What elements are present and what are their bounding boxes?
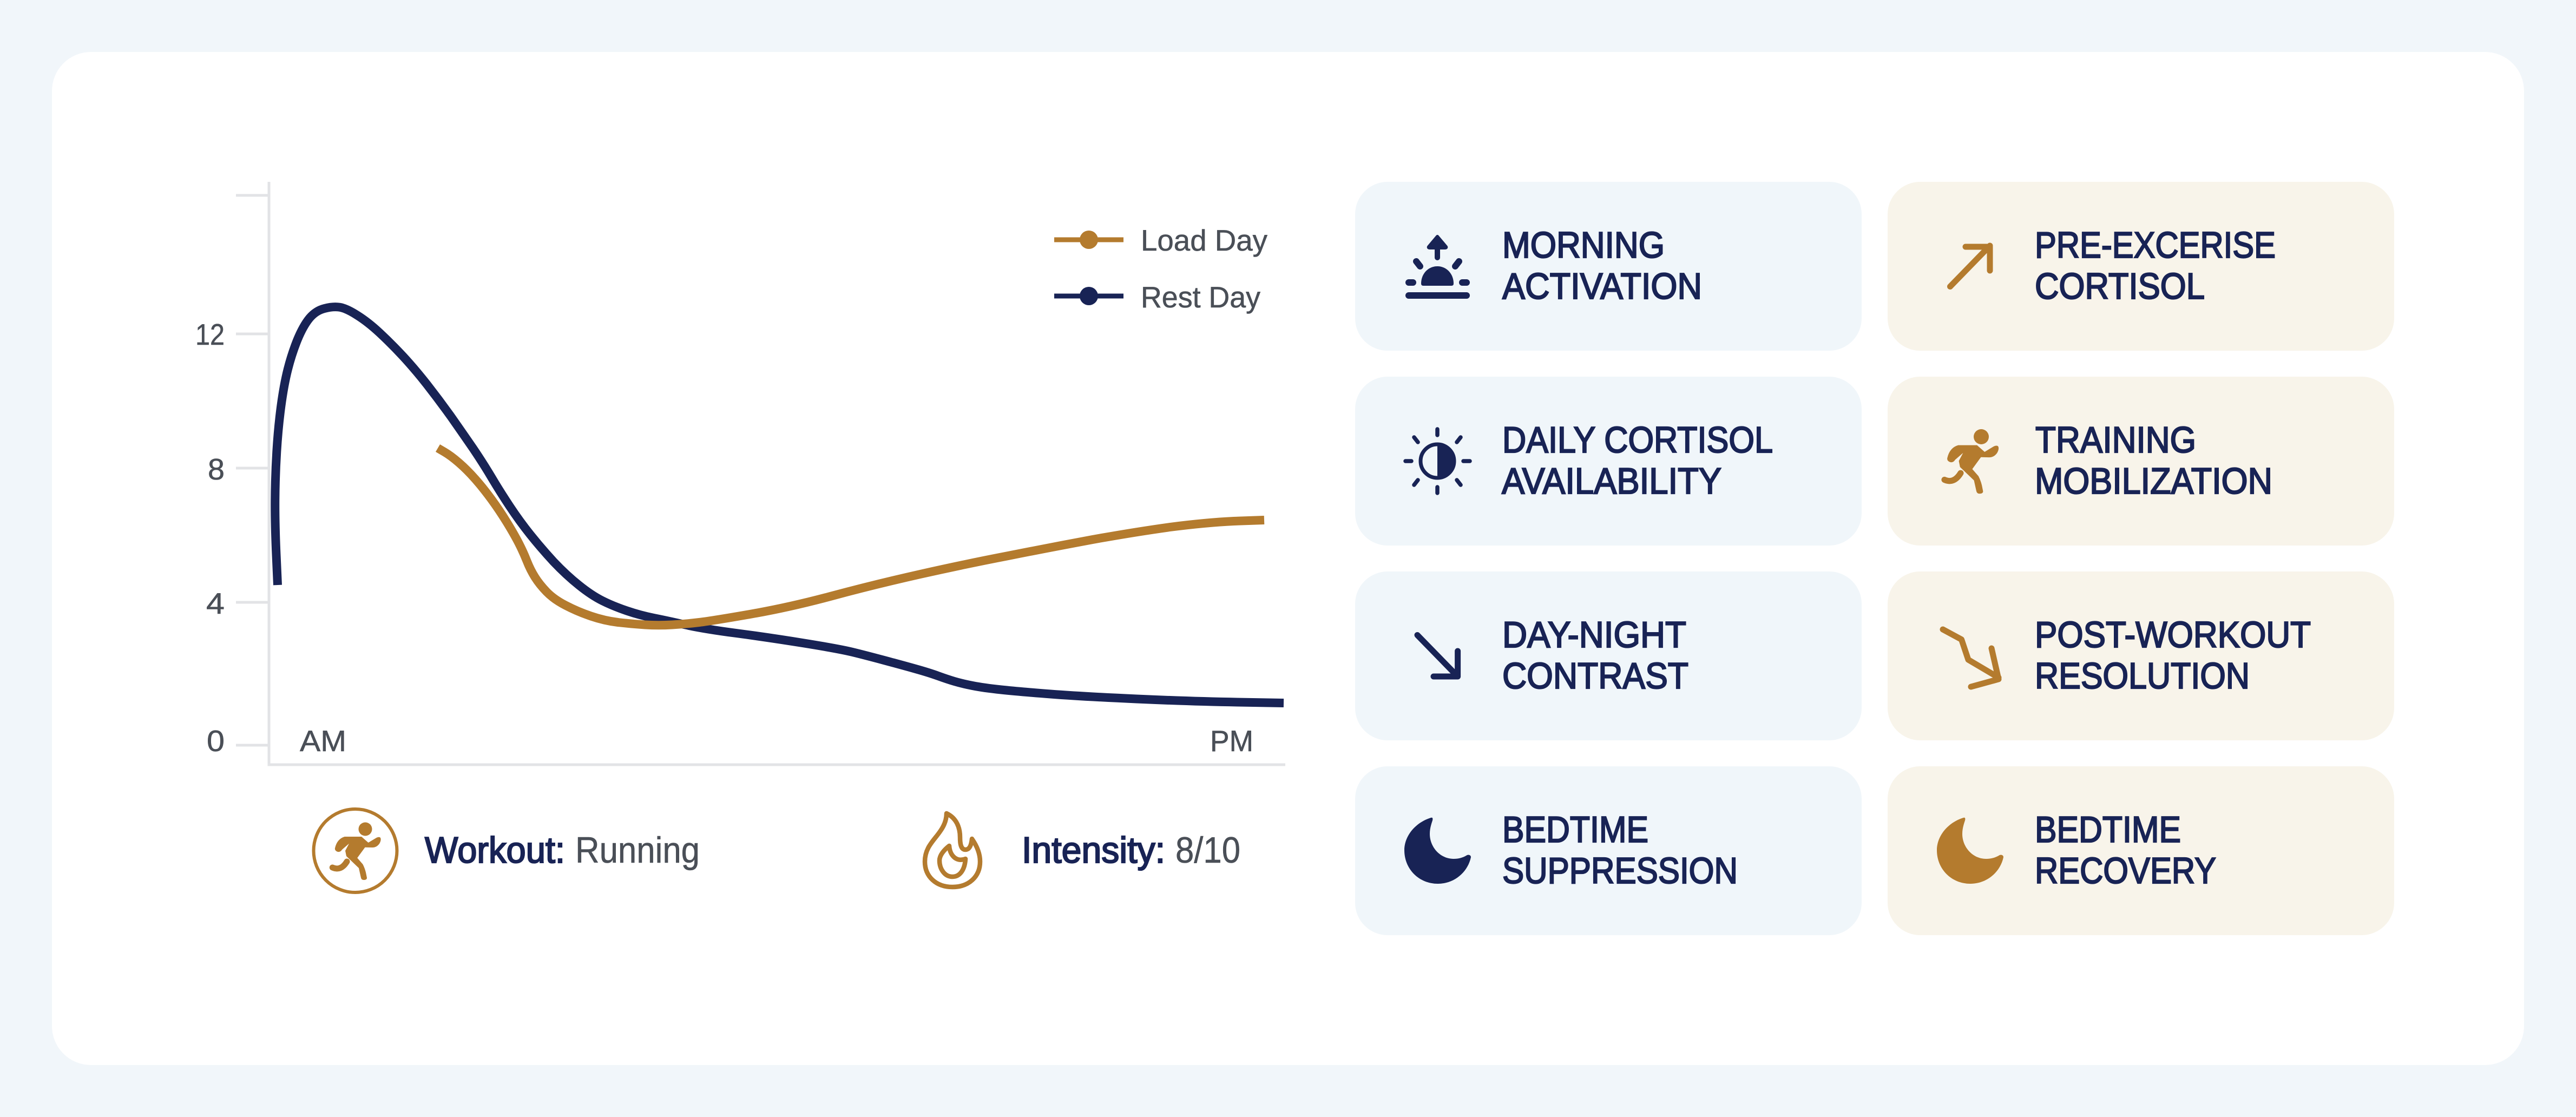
card title: RECOVERY: [2035, 850, 2216, 891]
y-axis labels: 8: [208, 452, 225, 486]
workout label: Workout:: [425, 830, 565, 871]
panel: post-workout resolution: [1888, 571, 2394, 740]
card title: BEDTIME: [1502, 809, 1648, 850]
panel: pre-exercise cortisol: [1888, 182, 2394, 351]
panel: day-night contrast: [1355, 571, 1862, 740]
card title: CORTISOL: [2035, 266, 2205, 307]
line chart: [195, 182, 1285, 765]
card title: SUPPRESSION: [1502, 850, 1738, 891]
card title: [1502, 419, 1773, 502]
card title: MORNING: [1502, 225, 1665, 266]
workout value: Running: [575, 830, 700, 871]
icon: moon: [1937, 818, 2003, 884]
legend item: rest day: Rest Day: [1141, 280, 1260, 314]
icon: running person: [1944, 429, 1999, 494]
panel: morning activation: [1355, 182, 1862, 351]
line: rest day: [275, 307, 1284, 703]
card title: [1502, 809, 1738, 891]
card title: [2035, 614, 2311, 697]
y-axis labels: [195, 318, 225, 758]
icon: sunrise: [1409, 236, 1467, 295]
card title: PRE-EXCERISE: [2035, 225, 2276, 266]
x-axis label: PM: PM: [1210, 724, 1253, 758]
panel: training mobilization: [1888, 377, 2394, 546]
y-axis labels: 0: [207, 724, 225, 758]
intensity value: 8/10: [1175, 830, 1240, 871]
panel: bedtime recovery: [1888, 766, 2394, 935]
workout info: [314, 809, 700, 892]
legend item: rest day: [1054, 280, 1260, 314]
legend item: load day: [1054, 224, 1267, 257]
icon: half sun: [1405, 429, 1470, 493]
card title: TRAINING: [2035, 419, 2196, 461]
x-axis label: AM: AM: [300, 724, 346, 758]
icon: arrow up right: [1950, 246, 1990, 287]
card title: [2035, 809, 2216, 891]
chart axes: [236, 182, 1285, 765]
card title: CONTRAST: [1502, 655, 1688, 697]
line: load day: [438, 448, 1264, 625]
icon: zigzag arrow down: [1943, 629, 1999, 687]
card title: BEDTIME: [2035, 809, 2181, 850]
card title: AVAILABILITY: [1502, 461, 1721, 502]
icon: flame: [925, 813, 980, 887]
card title: MOBILIZATION: [2035, 461, 2272, 502]
legend item: load day: Load Day: [1141, 224, 1267, 257]
y-axis labels: 12: [195, 318, 225, 351]
card title: [2035, 225, 2276, 307]
panel: bedtime suppression: [1355, 766, 1862, 935]
y-axis labels: 4: [206, 587, 225, 620]
icon: arrow down right: [1417, 635, 1458, 676]
panel: daily cortisol availability: [1355, 377, 1862, 546]
card title: ACTIVATION: [1502, 266, 1702, 307]
legend: [1054, 224, 1267, 314]
intensity label: Intensity:: [1022, 830, 1165, 871]
card title: [1502, 614, 1688, 697]
card title: DAILY CORTISOL: [1502, 419, 1773, 461]
card title: [1502, 225, 1702, 307]
icon: running person in circle: [314, 809, 397, 892]
icon: moon: [1404, 818, 1471, 884]
card title: [2035, 419, 2272, 502]
card title: POST-WORKOUT: [2035, 614, 2311, 655]
card title: RESOLUTION: [2035, 655, 2250, 697]
intensity info: [925, 813, 1240, 887]
card title: DAY-NIGHT: [1502, 614, 1686, 655]
